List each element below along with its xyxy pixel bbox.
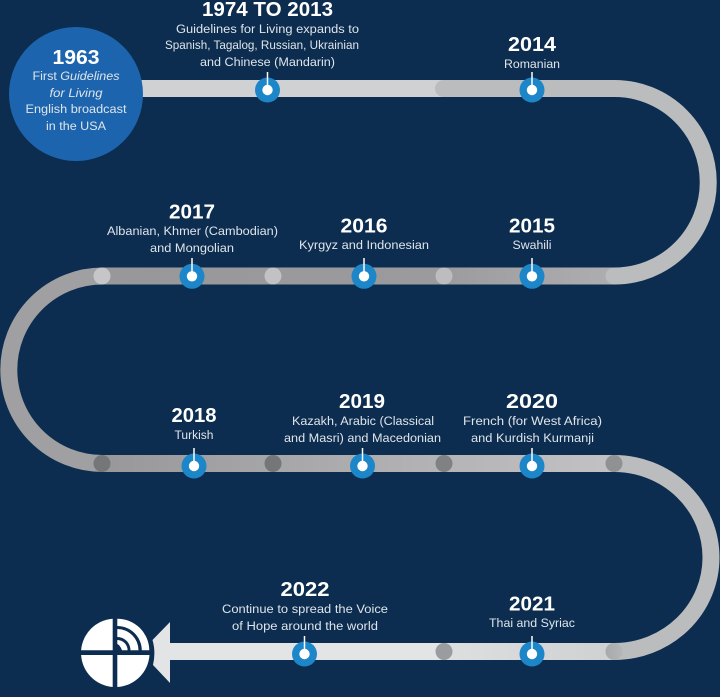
label: 2022: 2022 xyxy=(280,578,330,601)
label: 2017: Albanian, Khmer (Cambodian) xyxy=(107,224,278,238)
marker: 2016 xyxy=(352,258,376,289)
label: 2018 xyxy=(172,404,216,442)
marker: 2020 xyxy=(520,448,544,478)
logo icon xyxy=(81,619,150,687)
label: 1974 to 2013 xyxy=(165,0,359,69)
label: 2019: Kazakh, Arabic (Classical xyxy=(292,414,434,428)
marker: 2017 xyxy=(180,258,204,289)
panel: 1963 start circle: in the USA xyxy=(46,119,107,133)
panel: 1963 start circle: 1963 xyxy=(52,46,100,69)
label: 2022 xyxy=(222,578,388,633)
label: 2018: Turkish xyxy=(174,428,214,442)
label: 2021: Thai and Syriac xyxy=(489,616,575,630)
marker: 2021 xyxy=(520,636,544,666)
marker: 2014 xyxy=(520,72,544,102)
label: 2019 xyxy=(284,390,441,445)
label: 2019: and Masri) and Macedonian xyxy=(284,431,441,445)
label: 2021 xyxy=(489,592,575,630)
marker: 1974 to 2013 xyxy=(255,72,280,102)
label: 2015 xyxy=(509,214,555,252)
label: 2015: 2015 xyxy=(509,214,555,238)
label: 2021: 2021 xyxy=(509,592,555,616)
label: 2020: French (for West Africa) xyxy=(463,414,602,428)
marker: 2019 xyxy=(350,448,375,478)
label: 2017: 2017 xyxy=(169,200,215,224)
label: 2016: 2016 xyxy=(340,214,388,238)
label: 2016: Kyrgyz and Indonesian xyxy=(299,238,429,252)
label: 2022: of Hope around the world xyxy=(232,619,378,633)
label: 2016 xyxy=(299,214,429,252)
panel: 1963 start circle: English broadcast xyxy=(26,102,127,116)
label: 2014 xyxy=(504,33,560,71)
label: 2019: 2019 xyxy=(339,390,385,413)
panel: 1963 start circle: First Guidelines xyxy=(32,69,120,83)
track joints xyxy=(94,268,622,660)
marker: 2015 xyxy=(520,258,544,289)
label: 1974 to 2013: Spanish, Tagalog, Russian, Ukrainian xyxy=(165,38,359,52)
arrowhead xyxy=(152,622,170,683)
label: 2020: and Kurdish Kurmanji xyxy=(471,431,594,445)
label: 2020: 2020 xyxy=(506,390,558,413)
label: 2017 xyxy=(107,200,278,255)
marker: 2022 xyxy=(292,636,317,666)
label: 1974 to 2013: and Chinese (Mandarin) xyxy=(200,55,335,69)
label: 2014: Romanian xyxy=(504,57,560,71)
label: 2018: 2018 xyxy=(172,404,216,427)
label: 2022: Continue to spread the Voice xyxy=(222,602,388,616)
panel: 1963 start circle: for Living xyxy=(50,86,103,100)
marker: 2018 xyxy=(182,448,206,478)
label: 2017: and Mongolian xyxy=(150,241,234,255)
panel: 1963 start circle xyxy=(9,27,143,161)
label: 2014: 2014 xyxy=(508,33,557,56)
label: 2020 xyxy=(463,390,602,445)
label: 1974 to 2013: Guidelines for Living expands to xyxy=(176,22,359,36)
label: 2015: Swahili xyxy=(512,238,552,252)
